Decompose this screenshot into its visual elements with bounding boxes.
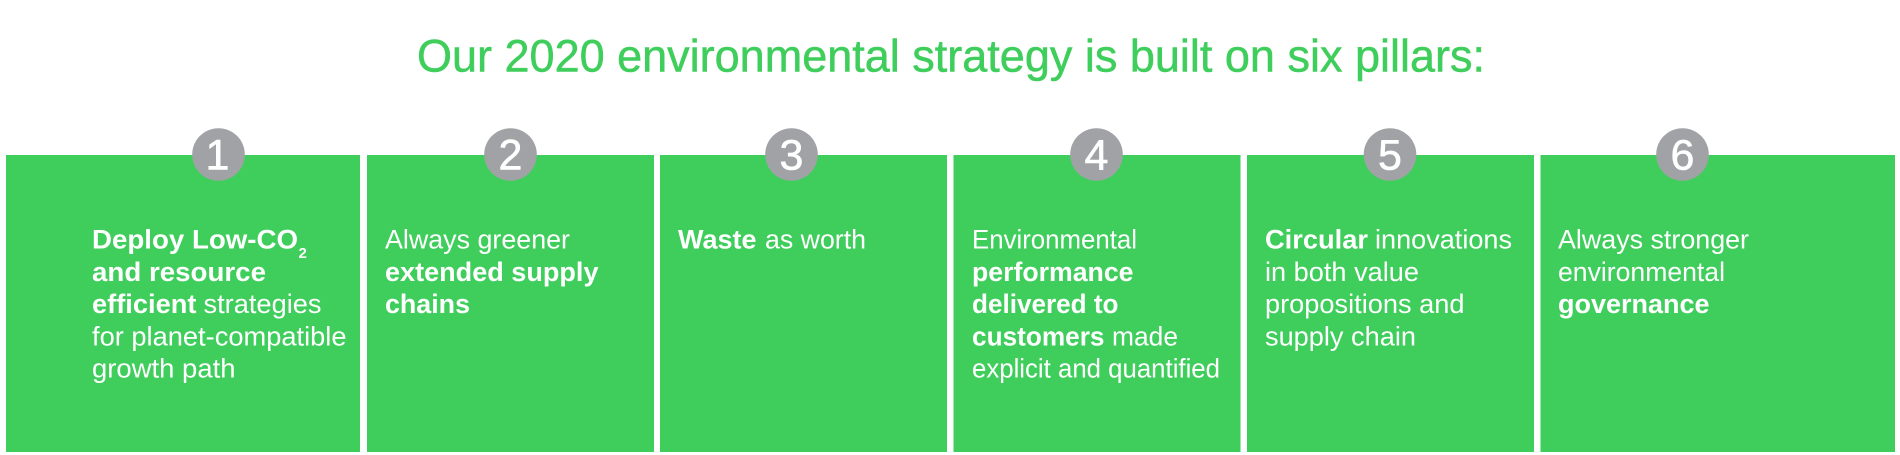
- text: pillar 4: performance: [972, 257, 1134, 287]
- text: pillar 2: chains: [385, 289, 470, 319]
- panel: pillar 1: [6, 128, 360, 452]
- panel: pillar 4: [954, 128, 1240, 452]
- text: pillar 2: extended supply: [385, 257, 598, 287]
- text: pillar 5: in both value: [1265, 257, 1419, 287]
- text: pillar 6: Always stronger: [1558, 224, 1749, 254]
- text: pillar 1: for planet-compatible: [92, 321, 346, 351]
- number badge 6: 6: [1671, 132, 1694, 180]
- panel: pillar 3: [660, 128, 947, 452]
- number badge 1: 1: [206, 132, 229, 180]
- number badge 2: 2: [499, 132, 522, 180]
- text: pillar 5: innovations: [1375, 224, 1512, 254]
- text: pillar 4: made: [1112, 321, 1178, 351]
- text: pillar 5: Circular: [1265, 224, 1368, 254]
- text: pillar 1: [92, 224, 346, 384]
- number badge 4: [1070, 128, 1123, 181]
- text: pillar 2: Always greener: [385, 224, 570, 254]
- text: pillar 4: customers: [972, 321, 1104, 351]
- text: pillar 5: propositions and: [1265, 289, 1464, 319]
- number badge 3: 3: [780, 132, 803, 180]
- text: pillar 6: [1558, 224, 1749, 319]
- number badge 1: [192, 128, 245, 181]
- text: pillar 3: Waste: [678, 224, 756, 254]
- text: pillar 3: [678, 224, 866, 254]
- text: pillar 6: environmental: [1558, 257, 1725, 287]
- text: pillar 5: supply chain: [1265, 321, 1416, 351]
- text: pillar 3: as worth: [765, 224, 866, 254]
- text: pillar 1: and resource: [92, 257, 266, 287]
- text: pillar 1: strategies: [204, 289, 322, 319]
- text: pillar 2: [385, 224, 598, 319]
- number badge 2: [484, 128, 537, 181]
- text: pillar 1: growth path: [92, 354, 236, 384]
- number badge 5: 5: [1378, 132, 1402, 180]
- number badge 4: 4: [1085, 132, 1108, 180]
- panel: pillar 6: [1540, 128, 1895, 452]
- number badge 6: [1656, 128, 1709, 181]
- text: pillar 1: 2: [298, 245, 307, 262]
- text: pillar 4: explicit and quantified: [972, 354, 1220, 384]
- title: Our 2020 environmental strategy is built on six pillars:: [417, 30, 1485, 82]
- panel: pillar 2: [367, 128, 654, 452]
- number badge 5: [1364, 128, 1416, 181]
- text: pillar 4: Environmental: [972, 224, 1137, 254]
- text: pillar 4: delivered to: [972, 289, 1118, 319]
- number badge 3: [765, 128, 818, 181]
- text: pillar 1: Deploy Low-CO: [92, 224, 298, 254]
- text: pillar 5: [1265, 224, 1512, 351]
- text: pillar 1: efficient: [92, 289, 196, 319]
- text: pillar 6: governance: [1558, 289, 1710, 319]
- text: pillar 4: [972, 224, 1220, 384]
- panel: pillar 5: [1247, 128, 1534, 452]
